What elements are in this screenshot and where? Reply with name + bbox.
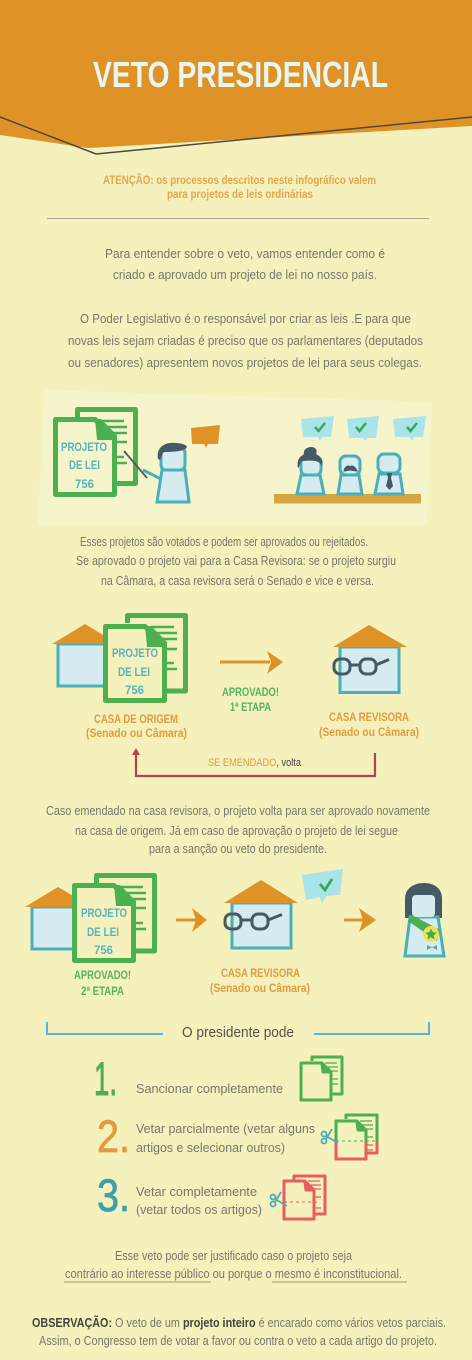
attention note: para projetos de leis ordinárias (167, 189, 313, 201)
diagram: second stage (25, 869, 444, 998)
label: approved stage 1 (222, 685, 279, 714)
label (136, 1121, 315, 1155)
approval bubble (302, 869, 343, 904)
figure: senator with tie (375, 454, 403, 494)
intro text: Para entender sobre o veto, vamos entender como é (105, 246, 385, 261)
label (136, 1184, 262, 1217)
label: reviewing house: (Senado ou Câmara) (319, 725, 419, 739)
option 1: sanction (94, 1052, 342, 1105)
number 3: 3. (97, 1170, 130, 1221)
icon: bill document (56, 410, 136, 494)
icon: house of origin (25, 887, 92, 949)
label: reviewing house (319, 710, 419, 739)
note: observation (32, 1315, 446, 1348)
icon: bill document (74, 876, 154, 960)
option 2: partial veto (97, 1111, 378, 1162)
icon: reviewing house (224, 880, 298, 948)
icon: half green half red document (336, 1115, 378, 1159)
label: house of origin (86, 712, 187, 740)
text: amended process (46, 803, 430, 856)
panel: presentation illustration (38, 390, 432, 525)
arrow: approved (220, 651, 283, 674)
attention note (103, 174, 376, 201)
figure: senator with hair bun (297, 447, 324, 494)
arrow (176, 908, 207, 932)
text: amended process: na casa de origem. Já em caso de aprovação o projeto de lei segue (75, 823, 398, 838)
text: voting explanation: na Câmara, a casa revisora será o Senado e vice e versa. (101, 573, 374, 588)
label: approved stage 2: 2ª ETAPA (81, 984, 124, 998)
icon: bill document: PROJETO (61, 440, 107, 454)
text: justification: contrário ao interesse público ou porque o mesmo é inconstitucional. (65, 1266, 402, 1281)
figure: presenter (124, 443, 189, 502)
icon: bill document: 756 (125, 683, 144, 697)
text: amended process: para a sanção ou veto do presidente. (149, 841, 327, 856)
icon: bill document: DE LEI (87, 925, 119, 939)
intro text: novas leis sejam criadas é preciso que os parlamentares (deputados (68, 333, 423, 348)
label: house of origin: CASA DE ORIGEM (94, 712, 178, 726)
heading: the president can (47, 1022, 429, 1041)
icon: bill document: PROJETO (112, 646, 158, 660)
intro text: ou senadores) apresentem novos projetos de lei para seus colegas. (68, 355, 422, 370)
label: house of origin: (Senado ou Câmara) (86, 726, 187, 740)
icon: bill document: DE LEI (69, 458, 100, 472)
label: approved stage 2: APROVADO! (74, 968, 131, 982)
icon: house of origin (52, 624, 118, 686)
label: approved stage 1: APROVADO! (222, 685, 279, 699)
arrow (344, 908, 376, 932)
table (274, 494, 421, 504)
text: voting explanation: Se aprovado o projeto vai para a Casa Revisora: se o projeto surgiu (76, 553, 396, 568)
label: (vetar todos os artigos) (136, 1202, 262, 1217)
diagram: first stage (52, 616, 419, 776)
icon: scissors (322, 1129, 338, 1144)
header banner (0, 0, 472, 154)
text: justification: Esse veto pode ser justificado caso o projeto seja (115, 1248, 353, 1263)
label: approved stage 2 (74, 968, 131, 998)
title: VETO PRESIDENCIAL (93, 54, 388, 95)
icon: bill document: PROJETO (81, 906, 127, 920)
note: observation: OBSERVAÇÃO: O veto de um projeto inteiro é encarado como vários vetos parciais. (32, 1315, 446, 1330)
attention note: ATENÇÃO: os processos descritos neste infográfico valem (103, 174, 376, 187)
icon: bill document: 756 (75, 477, 94, 491)
text: justification (64, 1248, 407, 1282)
icon: red document (284, 1176, 325, 1219)
number 2: 2. (97, 1111, 130, 1162)
figure: president (405, 883, 444, 956)
icon: scissors (270, 1192, 287, 1206)
icon: green document (301, 1057, 342, 1100)
figure: senator with moustache (338, 456, 362, 494)
intro text: O Poder Legislativo é o responsável por criar as leis .E para que (80, 311, 411, 326)
option 3: full veto (97, 1170, 325, 1221)
label: Vetar completamente (136, 1184, 257, 1199)
label: if amended, returns: SE EMENDADO, volta (208, 757, 302, 769)
heading: the president can: O presidente pode (182, 1024, 294, 1041)
label: reviewing house: CASA REVISORA (329, 710, 409, 724)
label: Sancionar completamente (136, 1081, 283, 1096)
label: approved stage 1: 1ª ETAPA (230, 700, 271, 714)
icon: bill document: DE LEI (118, 665, 150, 679)
icon: reviewing house (333, 625, 407, 692)
label: reviewing house: (Senado ou Câmara) (210, 981, 310, 995)
approval bubbles (301, 416, 426, 441)
text: voting explanation: Esses projetos são votados e podem ser aprovados ou rejeitados. (80, 534, 368, 549)
number 1: 1. (94, 1052, 117, 1105)
label: artigos e selecionar outros) (136, 1140, 285, 1155)
arrow: return path if amended (132, 748, 375, 776)
intro text: criado e aprovado um projeto de lei no nosso país. (113, 267, 377, 282)
icon: bill document (106, 616, 186, 700)
label: Vetar parcialmente (vetar alguns (136, 1121, 315, 1136)
intro text (68, 246, 423, 370)
speech bubble: presenter (191, 425, 220, 448)
label: reviewing house (210, 966, 310, 995)
icon: bill document: 756 (94, 943, 113, 957)
label: reviewing house: CASA REVISORA (221, 966, 300, 980)
text: voting explanation (76, 534, 396, 588)
